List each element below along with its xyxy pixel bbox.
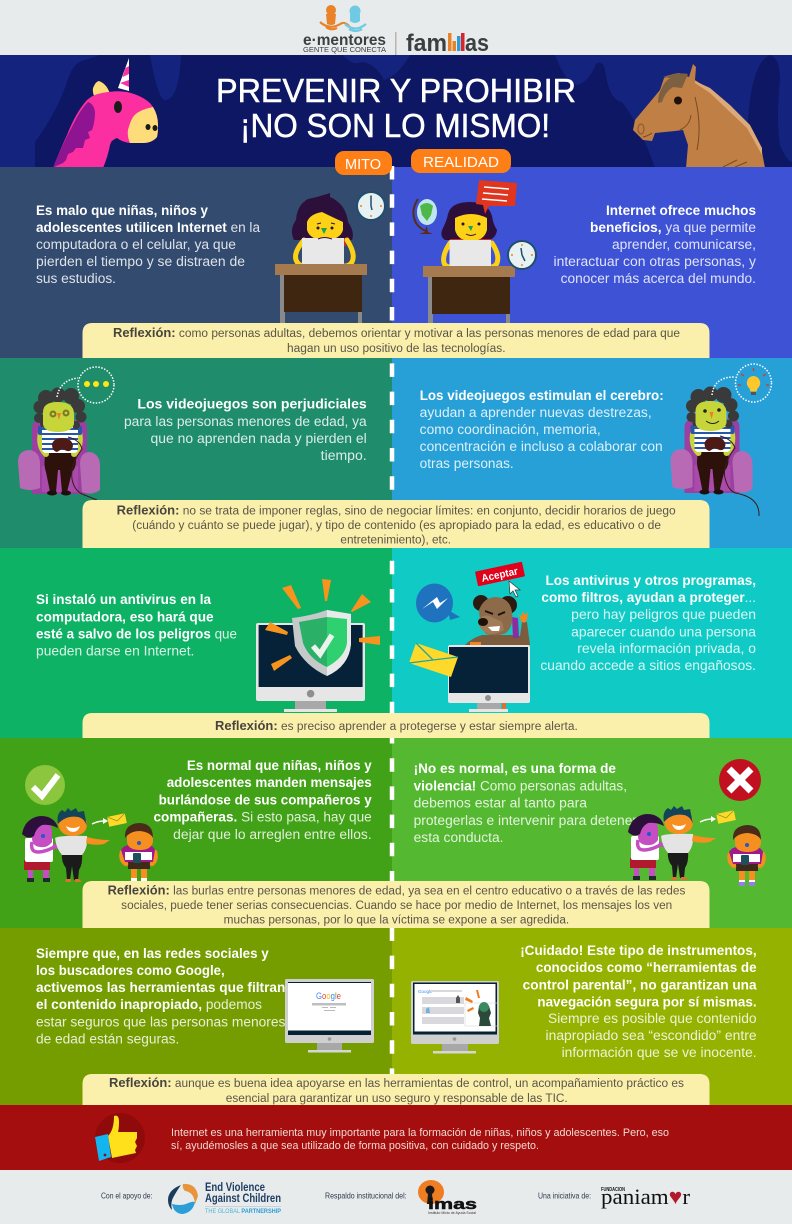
text: reality 2: otras personas. <box>420 456 514 471</box>
text: myth 4: adolescentes manden mensajes <box>167 775 372 790</box>
credit: Una iniciativa: Una iniciativa de: <box>538 1190 591 1200</box>
text: myth 3 <box>36 592 237 658</box>
text: reality 3: como filtros, ayudan a proteger... <box>541 590 756 605</box>
footer <box>0 1170 792 1224</box>
text: myth 5: activemos las herramientas que filtran <box>36 980 285 995</box>
text: reality 1: Internet ofrece muchos <box>606 203 756 218</box>
closing banner <box>0 1105 792 1170</box>
label: MITO <box>335 151 392 175</box>
text: reality 4: violencia! Como personas adultas, <box>414 778 627 794</box>
logo: e-mentores: e·mentores <box>303 32 386 49</box>
text: myth 4: Es normal que niñas, niños y <box>187 758 372 773</box>
text: reality 5: Siempre es posible que contenido <box>548 1011 757 1026</box>
text: reality 5: inapropiado sea “escondido” entre <box>546 1028 757 1043</box>
closing text <box>171 1127 669 1152</box>
heading <box>216 72 576 144</box>
illustration: happy gamer with light bulb <box>670 364 772 516</box>
icon: check mark <box>25 765 65 805</box>
text: myth 3: Si instaló un antivirus en la <box>36 592 211 607</box>
logo: familias: as <box>465 30 489 57</box>
closing text: sí, ayudémosles a que sea utilizado de forma positiva, con cuidado y respeto. <box>171 1140 539 1152</box>
text: myth 1: Es malo que niñas, niños y <box>36 203 208 218</box>
text: reality 2 <box>420 388 664 471</box>
text: reality 5: información que se ve inocente. <box>562 1045 757 1060</box>
text: myth 4 <box>154 758 372 842</box>
reflection 5 <box>82 1074 710 1106</box>
text: reality 3: pero hay peligros que pueden <box>571 607 756 622</box>
icon: thumbs up <box>95 1113 145 1163</box>
text: myth 5: los buscadores como Google, <box>36 963 225 978</box>
text: reality 4 <box>414 761 638 845</box>
text: reality 3: cuando accede a sitios engañosos. <box>540 658 756 673</box>
text: reality 3: revela información privada, o <box>577 641 756 656</box>
credit: Respaldo institucional: imas <box>428 1196 477 1213</box>
heading: ¡NO SON LO MISMO! <box>240 107 550 144</box>
text: reality 3 <box>540 573 756 673</box>
text: reality 2: como coordinación, memoria, <box>420 422 601 437</box>
text: myth 1: computadora o el celular, ya que <box>36 237 236 252</box>
icon: cross mark <box>719 759 761 801</box>
logo: familias <box>406 30 489 57</box>
text: myth 3: pueden darse en Internet. <box>36 644 194 658</box>
closing text: Internet es una herramienta muy importante para la formación de niñas, niños y adolescentes. Pero, eso <box>171 1127 669 1139</box>
credit: Con el apoyo de: Con el apoyo de: <box>101 1190 152 1200</box>
text: reality 4: ¡No es normal, es una forma de <box>414 761 616 776</box>
credit: Con el apoyo de: THE GLOBAL PARTNERSHIP <box>205 1208 282 1215</box>
text: myth 5 <box>36 946 286 1046</box>
credit: Una iniciativa <box>538 1184 691 1209</box>
text: reality 4: esta conducta. <box>414 830 504 845</box>
text: myth 1: sus estudios. <box>36 271 116 286</box>
text: myth 5: de edad están seguras. <box>36 1032 179 1046</box>
reflection 2: (cuándo y cuánto se puede jugar), y tipo de contenido (es apropiado para la edad, es educativo o de <box>132 520 661 532</box>
text: myth 4: compañeras. Si esto pasa, hay que <box>154 810 372 824</box>
reflection 1 <box>82 323 710 358</box>
text: reality 1 <box>554 203 756 286</box>
text: myth 2: Los videojuegos son perjudiciales <box>137 396 367 412</box>
text: reality 2: ayudan a aprender nuevas destrezas, <box>420 405 652 420</box>
text: reality 2: concentración e incluso a colaborar con <box>420 439 663 454</box>
illustration: monitor with search page <box>285 979 374 1052</box>
reflection 4: Reflexión: las burlas entre personas menores de edad, ya sea en el centro educativo o a través de las redes <box>108 884 686 898</box>
reflection 5: Reflexión: aunque es buena idea apoyarse en las herramientas de control, un acompañamiento práctico es <box>109 1076 684 1090</box>
text: reality 1: beneficios, ya que permite <box>590 220 756 235</box>
reflection 3 <box>82 713 710 738</box>
text: myth 4: dejar que lo arreglen entre ellos. <box>173 827 372 842</box>
label: MITO: MITO <box>345 156 381 173</box>
illustration: worried gamer in armchair <box>18 367 114 500</box>
text: myth 2: tiempo. <box>321 448 367 463</box>
credit: Con el apoyo de: End Violence <box>205 1182 265 1194</box>
logo: familias: fam <box>406 30 447 57</box>
reflection 4: sociales, puede tener serias consecuencias. Cuando se hace por medio de Internet, los mensajes los ven <box>121 900 672 912</box>
credit: Respaldo institucional: Instituto Mixto de Ayuda Social <box>428 1211 476 1215</box>
illustration: monitor with search page: Google <box>316 991 341 1002</box>
text: myth 5: el contenido inapropiado, podemos <box>36 997 262 1012</box>
reflection 1: hagan un uso positivo de las tecnologías. <box>287 343 506 355</box>
text: reality 1: aprender, comunicarse, <box>612 237 756 252</box>
text: myth 1: adolescentes utilicen Internet en la <box>36 220 260 235</box>
header band with logos <box>0 0 792 57</box>
icon: envelope <box>409 643 458 677</box>
button: Aceptar <box>475 562 525 597</box>
icon: messenger bubble <box>416 584 460 622</box>
reflection 2: entretenimiento), etc. <box>340 534 451 546</box>
reflection 5: esencial para garantizar un uso seguro y responsable de las TIC. <box>226 1093 568 1105</box>
illustration: monitor with hidden inappropriate content: Google <box>418 989 433 994</box>
text: myth 5: Siempre que, en las redes sociales y <box>36 946 269 961</box>
text: reality 1: conocer más acerca del mundo. <box>561 271 756 286</box>
reflection 1: Reflexión: como personas adultas, debemos orientar y motivar a las personas menores de edad para que <box>113 326 680 340</box>
text: reality 3: aparecer cuando una persona <box>571 624 756 640</box>
text: reality 5: control parental”, no garantizan una <box>523 978 757 992</box>
text: reality 4: protegerlas e intervenir para detener <box>414 813 638 828</box>
text: reality 1: interactuar con otras personas, y <box>554 254 756 269</box>
text: reality 4: debemos estar al tanto para <box>414 796 588 810</box>
text: reality 5: navegación segura por sí mismas. <box>537 994 757 1010</box>
text: reality 5: conocidos como “herramientas de <box>536 960 757 975</box>
credit: Con el apoyo de <box>101 1182 282 1215</box>
credit: Respaldo institucional: Respaldo institucional del: <box>325 1190 407 1200</box>
title banner <box>0 55 792 168</box>
label: REALIDAD <box>411 149 511 173</box>
text: myth 4: burlándose de sus compañeros y <box>159 792 372 808</box>
text: reality 2: Los videojuegos estimulan el cerebro: <box>420 388 664 403</box>
text: myth 5: estar seguros que las personas menores <box>36 1014 286 1030</box>
illustration: monitor with hidden inappropriate content <box>411 981 499 1054</box>
text: reality 5: ¡Cuidado! Este tipo de instrumentos, <box>520 943 757 958</box>
text: myth 1: pierden el tiempo y se distraen de <box>36 254 245 269</box>
text: myth 2 <box>124 396 367 463</box>
credit: Con el apoyo de: Against Children <box>205 1193 281 1205</box>
label: REALIDAD: REALIDAD <box>423 154 499 171</box>
logo: e-mentores <box>303 5 386 54</box>
illustration: unicorn <box>53 58 158 168</box>
text: myth 2: para las personas menores de edad, ya <box>124 414 367 429</box>
credit: Una iniciativa: paniam♥r <box>601 1184 691 1209</box>
text: myth 3: esté a salvo de los peligros que <box>36 626 237 642</box>
text: myth 2: que no aprenden nada y pierden el <box>150 431 367 446</box>
illustration: hyena behind monitor with phishing lures <box>409 562 530 712</box>
button: Aceptar: Aceptar <box>480 565 519 585</box>
credit: Una iniciativa: FUNDACION <box>601 1187 625 1193</box>
reflection 3: Reflexión: es preciso aprender a protegerse y estar siempre alerta. <box>215 719 578 733</box>
illustration: children mocking, repeated <box>628 806 764 886</box>
text: myth 3: computadora, eso hará que <box>36 610 214 624</box>
illustration: smiling girl at desk with globe, bubble and clock <box>413 180 536 327</box>
panels: section backgrounds <box>0 166 792 1105</box>
illustration: worried girl at desk with clock <box>275 192 385 325</box>
heading: PREVENIR Y PROHIBIR <box>216 72 576 109</box>
text: reality 3: Los antivirus y otros programas, <box>546 573 756 588</box>
logo: e-mentores: GENTE QUE CONECTA <box>303 47 386 54</box>
credit: Respaldo institucional <box>325 1180 477 1215</box>
reflection 4 <box>82 881 710 928</box>
reflection 4: muchas personas, por lo que la víctima se expone a ser agredida. <box>224 914 569 926</box>
text: reality 5 <box>520 943 757 1060</box>
text: myth 1 <box>36 203 260 286</box>
reflection 2 <box>82 500 710 548</box>
illustration: children mocking a classmate <box>22 808 156 882</box>
illustration: horse <box>633 64 765 168</box>
reflection 2: Reflexión: no se trata de imponer reglas, sino de negociar límites: en conjunto, decidir horarios de juego <box>117 504 676 518</box>
illustration: monitor with antivirus shield <box>256 579 380 712</box>
